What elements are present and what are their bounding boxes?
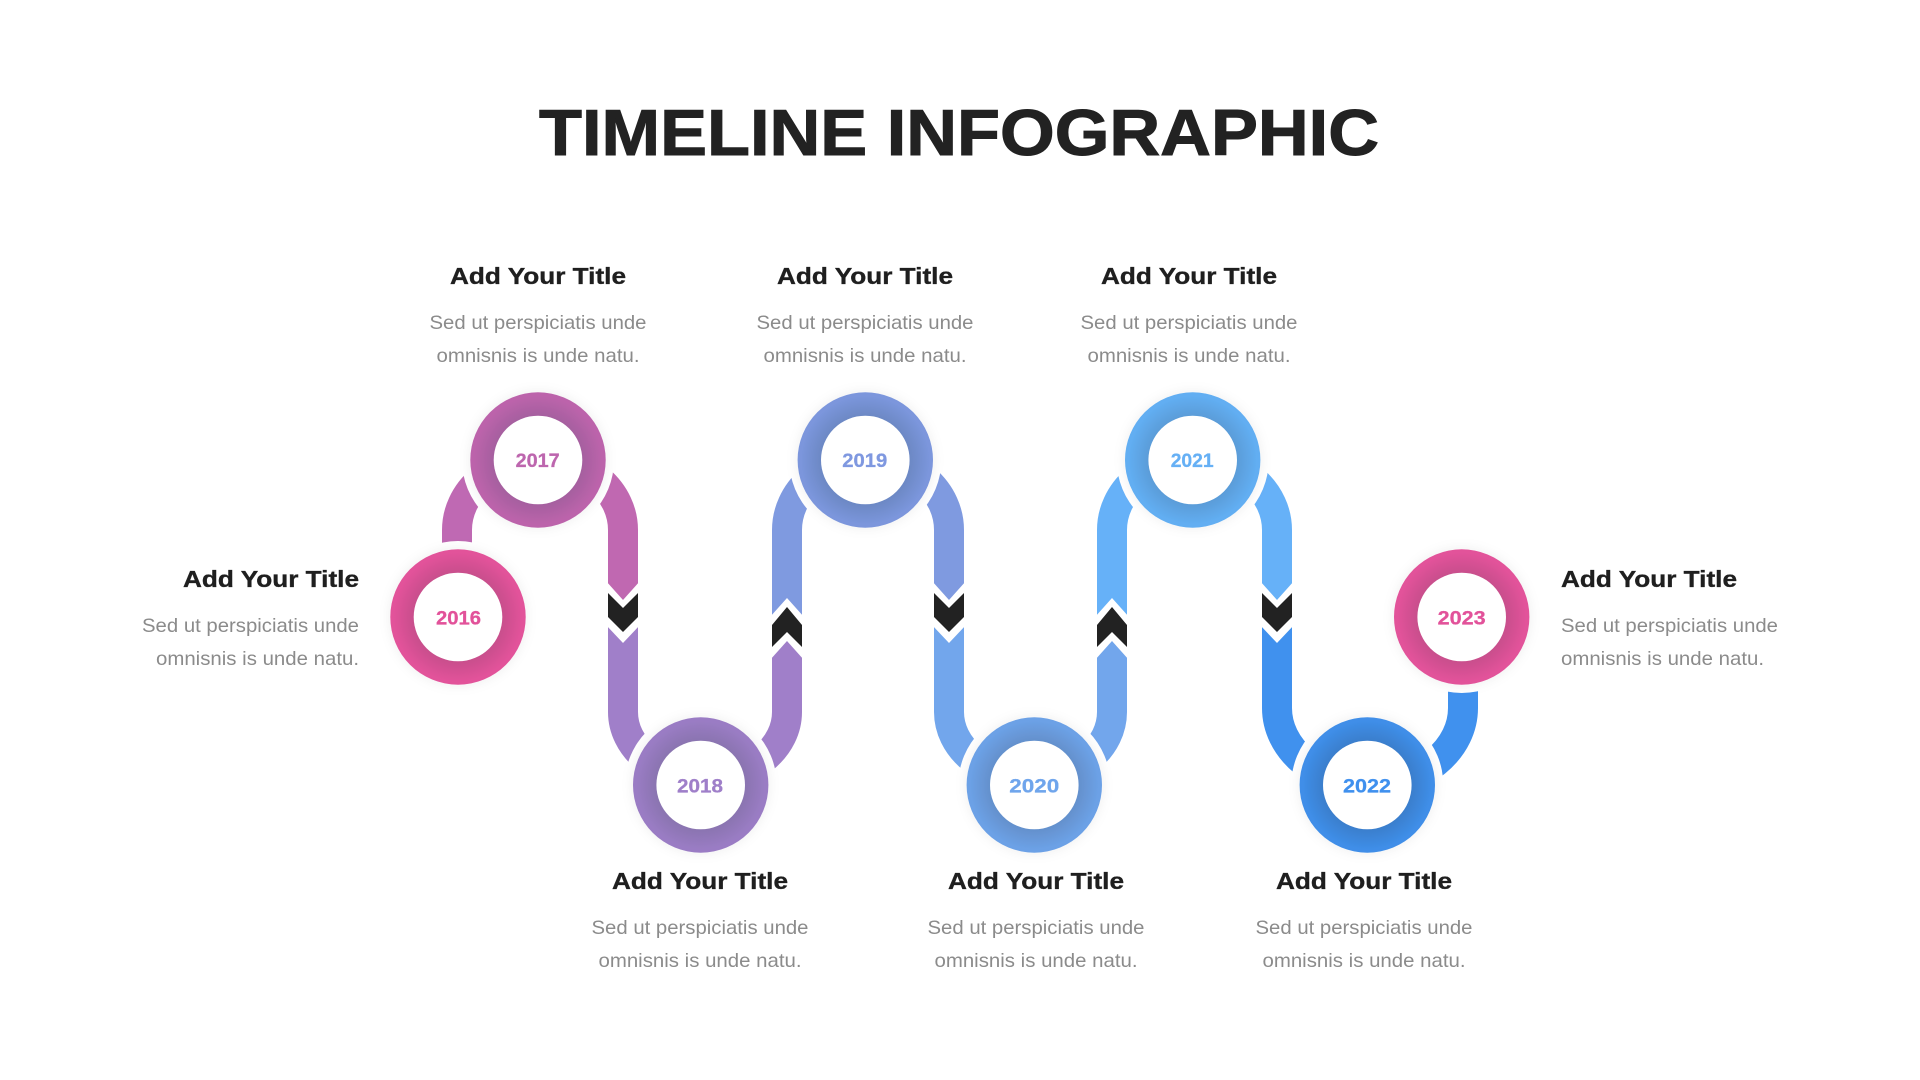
- text block 2022: omnisnis is unde natu.: [1262, 950, 1466, 972]
- winding timeline track: [457, 459, 1463, 784]
- track segment up to 2018: [623, 620, 787, 778]
- text block 2020: Add Your Title: [948, 868, 1124, 894]
- text block 2021: Sed ut perspiciatis unde: [1080, 312, 1298, 334]
- text block 2020: [928, 868, 1144, 972]
- text block 2017: omnisnis is unde natu.: [436, 345, 640, 367]
- text block 2018: Sed ut perspiciatis unde: [592, 917, 808, 939]
- chevron arrow up 2018-2019: [770, 598, 804, 660]
- year node 2023: 2023: [1438, 608, 1486, 630]
- text block 2023: Add Your Title: [1561, 566, 1737, 592]
- text block 2022: Add Your Title: [1276, 868, 1452, 894]
- year node 2018: [625, 709, 777, 861]
- text block 2023: omnisnis is unde natu.: [1561, 648, 1764, 670]
- text block 2020: Sed ut perspiciatis unde: [928, 917, 1144, 939]
- track segment 2020: [949, 620, 1112, 778]
- year node 2017: [462, 384, 614, 536]
- year node 2018: 2018: [677, 776, 723, 798]
- text block 2018: Add Your Title: [612, 868, 788, 894]
- text block 2017: Add Your Title: [450, 263, 626, 289]
- track segment 2022 to 2023: [1277, 617, 1463, 784]
- text block 2019: omnisnis is unde natu.: [764, 345, 966, 367]
- year node 2019: [789, 384, 941, 536]
- year node 2021: 2021: [1171, 450, 1214, 472]
- text block 2016: Add Your Title: [183, 566, 359, 592]
- year node 2016: 2016: [436, 608, 481, 630]
- track segment 2016 to 2017: [457, 459, 540, 617]
- year node 2023: [1386, 541, 1538, 693]
- year node 2022: [1291, 709, 1443, 861]
- text block 2023: Sed ut perspiciatis unde: [1561, 615, 1778, 637]
- text block 2018: [592, 868, 808, 972]
- track segment 2021: [1112, 459, 1277, 630]
- chevron arrow down 2019-2020: [932, 581, 966, 643]
- text block 2020: omnisnis is unde natu.: [934, 950, 1138, 972]
- track segment 2017 down: [540, 459, 623, 620]
- text block 2017: [430, 263, 646, 367]
- year node 2019: 2019: [842, 450, 887, 472]
- year node 2020: [958, 709, 1110, 861]
- text block 2019: Sed ut perspiciatis unde: [756, 312, 974, 334]
- text block 2016: omnisnis is unde natu.: [156, 648, 359, 670]
- year node 2021: [1117, 384, 1269, 536]
- text block 2022: [1256, 868, 1472, 972]
- text block 2017: Sed ut perspiciatis unde: [430, 312, 646, 334]
- text block 2021: [1080, 263, 1298, 367]
- title: TIMELINE INFOGRAPHIC: [539, 97, 1379, 169]
- year node 2017: 2017: [516, 450, 560, 472]
- text block 2016: [142, 566, 359, 670]
- year node 2020: 2020: [1009, 776, 1059, 798]
- text block 2023: [1561, 566, 1778, 670]
- chevron arrow down 2021-2022: [1260, 581, 1294, 643]
- text block 2022: Sed ut perspiciatis unde: [1256, 917, 1472, 939]
- track segment 2019 rising: [787, 459, 949, 630]
- text block 2019: [756, 263, 974, 367]
- text block 2019: Add Your Title: [777, 263, 953, 289]
- text block 2021: Add Your Title: [1101, 263, 1277, 289]
- chevron arrow up 2020-2021: [1095, 598, 1129, 660]
- year node 2022: 2022: [1343, 776, 1391, 798]
- chevron arrow down 2017-2018: [606, 581, 640, 643]
- text block 2021: omnisnis is unde natu.: [1088, 345, 1290, 367]
- text block 2016: Sed ut perspiciatis unde: [142, 615, 359, 637]
- text block 2018: omnisnis is unde natu.: [598, 950, 802, 972]
- year node 2016: [382, 541, 534, 693]
